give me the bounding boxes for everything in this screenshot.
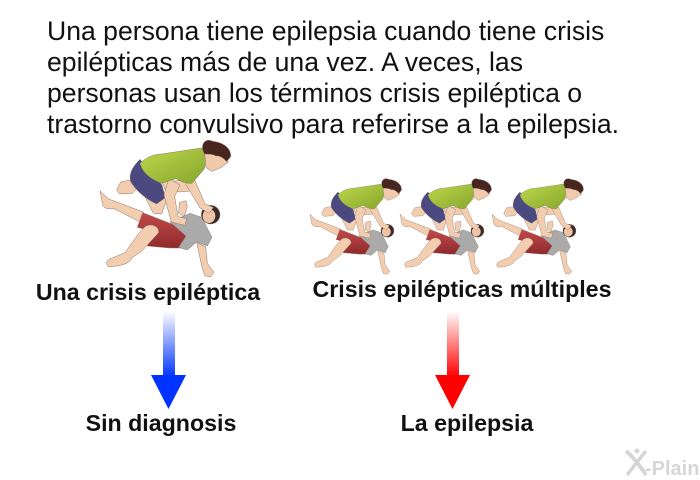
label: multiple seizures: Crisis epilépticas múltiples [313, 276, 611, 302]
label: no diagnosis: Sin diagnosis [86, 410, 236, 436]
intro paragraph [47, 16, 619, 139]
label: single seizure: Una crisis epiléptica [36, 279, 261, 305]
label: epilepsy: La epilepsia [401, 410, 534, 436]
arrow: red down [435, 311, 470, 409]
intro paragraph: trastorno convulsivo para referirse a la epilepsia. [47, 109, 619, 139]
illustration: multiple seizures first aid [310, 179, 583, 274]
logo: X-Plain [626, 448, 699, 480]
intro paragraph: epilépticas más de una vez. A veces, las [47, 47, 523, 77]
intro paragraph: Una persona tiene epilepsia cuando tiene crisis [47, 16, 604, 46]
intro paragraph: personas usan los términos crisis epiléptica o [47, 78, 582, 108]
arrow: blue down [151, 311, 186, 409]
logo: X-Plain: -Plain [645, 458, 699, 480]
illustration: single seizure first aid [100, 140, 231, 277]
